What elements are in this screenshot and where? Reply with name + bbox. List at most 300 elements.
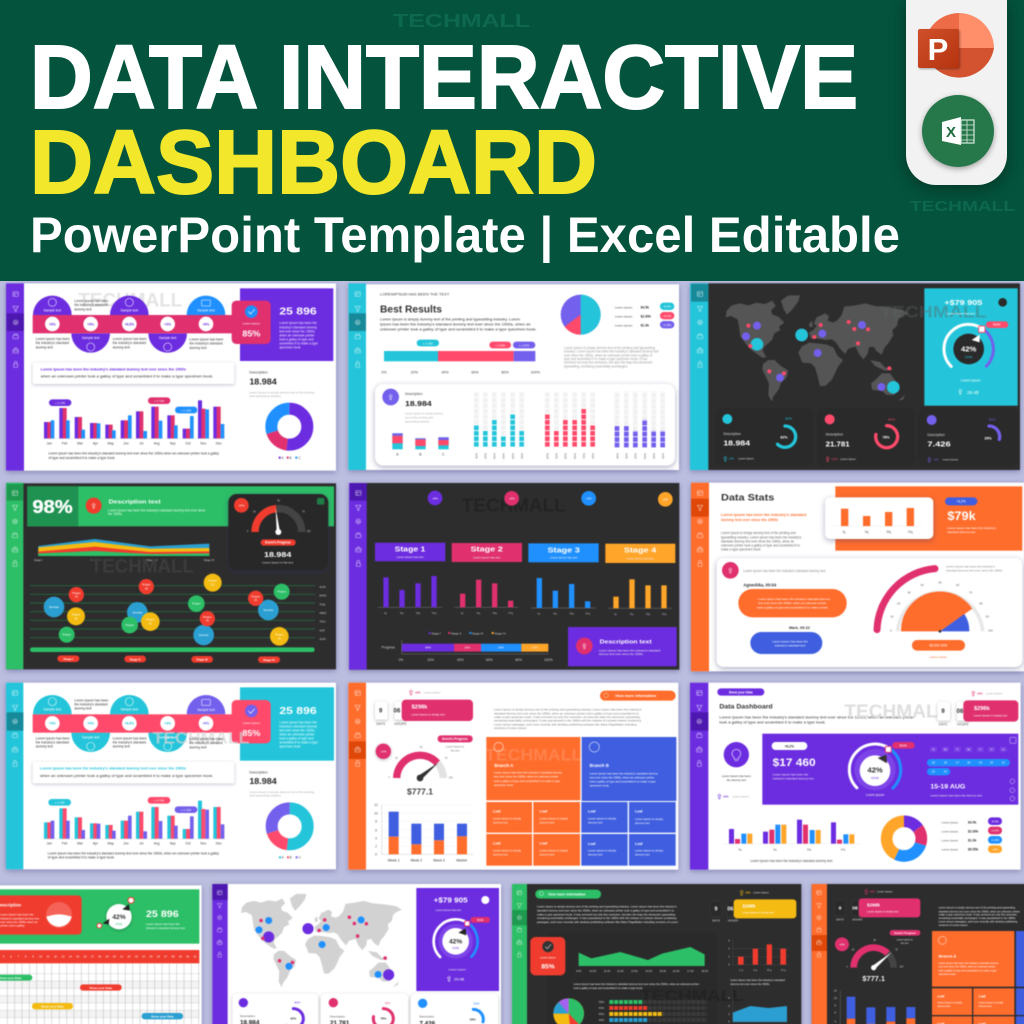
panel: Best Results: Lorem Ipsum: [615, 314, 633, 318]
panel: dark orange treemap (cropped): Lorem Ipsum is simply: [979, 1002, 1004, 1005]
panel: teal KPI dashboard: Feb: [62, 842, 68, 846]
panel: Best Results: 40%: [615, 453, 619, 459]
panel: green project timeline: Stage I: [34, 558, 43, 562]
panel: dark green analytics: 16:00: [673, 969, 680, 973]
panel: dark green analytics: Lorem Ipsum: [753, 891, 770, 895]
panel: Data Stats: $79k: [947, 510, 976, 523]
panel: orange treemap: dummy text: [540, 820, 554, 824]
panel: dark green analytics: 2: [728, 955, 730, 959]
panel: Data Stats: +6,2%: [956, 500, 966, 504]
panel: Best Results: typesetting, remaining essentially unchanged.: [564, 364, 628, 368]
panel: Data Dashboard purple: $4.5k: [968, 820, 976, 824]
panel: Best Results: ever since the 1500s, when an unknown printer took a galley of: [564, 353, 652, 357]
panel: purple KPI dashboard: Lorem Ipsum: [243, 322, 261, 326]
panel: Best Results: 30%: [634, 453, 638, 459]
panel: orange treemap: dummy text: [635, 853, 650, 857]
panel: dark world map: 18.984: [723, 439, 751, 448]
panel: green project timeline: Project: [146, 618, 155, 622]
panel: Data Dashboard purple: DONE: [871, 776, 879, 780]
panel: Data Stats: Lorem Ipsum has been the industry's standard dummy: [758, 597, 830, 601]
panel: purple KPI dashboard: of type and scrambled it to make a type book.: [48, 456, 116, 460]
panel: white world map purple: Description: [419, 1015, 435, 1019]
panel: dark orange treemap (cropped): Lorem Ipsum passages, and more recently with desktop publishing: [939, 920, 1018, 924]
panel: four stages dark: 13%: [532, 646, 538, 650]
panel: Data Stats: Lorem Ipsum has been the industry's: [946, 564, 995, 568]
panel: Data Dashboard purple: -8.4%: [991, 819, 999, 823]
panel: Data Stats: 20: [897, 602, 901, 606]
panel: four stages dark: IIq: [477, 611, 480, 615]
panel: Best Results: 30%: [555, 453, 559, 459]
panel: teal KPI dashboard: May: [108, 842, 114, 846]
panel: orange treemap: Event's Progress: [442, 737, 468, 741]
panel: purple KPI dashboard: 85%: [242, 330, 260, 339]
panel: orange treemap: Lorem Ipsum is simply: [635, 849, 664, 853]
panel: orange treemap: dummy text: [493, 820, 508, 824]
panel: dark green analytics: Lorem Ipsum is simply dummy text of the printing and typesetting industry. Lorem Ipsum has been the industry's: [537, 904, 677, 908]
panel: dark green analytics: 6: [728, 996, 730, 1000]
panel: Best Results: Description: [405, 392, 422, 396]
panel: green project timeline: WED: [319, 611, 327, 615]
panel: Data Dashboard purple: Lorem Ipsum: [942, 839, 959, 843]
panel: dark orange treemap (cropped): +6%: [869, 890, 875, 894]
panel: Data Stats: Lorem Ipsum has been the industry's standard dummy text.: [743, 569, 826, 573]
panel: green project timeline: 02: [75, 616, 78, 620]
panel: Best Results: Ipsum has been the industry's standard dummy text ever since the 1500s, when an: [380, 322, 531, 326]
panel: four stages dark: 100%: [544, 658, 553, 662]
panel: orange treemap: TECHMALL: [485, 745, 582, 764]
panel: orange treemap: HOURS: [394, 722, 407, 726]
panel: dark green analytics: II q: [753, 968, 758, 972]
panel: dark orange treemap (cropped): +6%: [839, 942, 845, 946]
panel: green calendar (cropped): 9: [32, 954, 34, 958]
panel: orange treemap: 25: [395, 758, 398, 760]
panel: teal KPI dashboard: the industry's standard: [74, 702, 108, 706]
panel: purple KPI dashboard: + 4 700: [154, 399, 164, 403]
panel: orange treemap: dummy text: [493, 852, 508, 856]
panel: green calendar (cropped): 22: [128, 954, 131, 958]
panel: orange treemap: Week4: [456, 859, 467, 863]
panel: dark orange treemap (cropped): Lorem Ipsum is simply dummy text of the printing and typesetting: [939, 905, 1016, 909]
panel: orange treemap: Leaf: [493, 809, 501, 813]
panel: purple KPI dashboard: took a galley of type and: [279, 337, 314, 341]
panel: orange treemap: dummy text: [588, 820, 603, 824]
panel: Best Results: 50%: [643, 453, 647, 459]
panel: teal KPI dashboard: of type and scrambled it to make a type book.: [48, 856, 115, 860]
panel: Data Dashboard purple: Lorem Ipsum has been the industry's standard dummy text.: [750, 859, 833, 863]
panel: teal KPI dashboard: [6, 683, 336, 869]
panel: teal KPI dashboard: Lorem Ipsum has been: [74, 698, 109, 702]
panel: green project timeline: Event's Progress: [265, 541, 291, 545]
panel: Data Dashboard purple: S: [1002, 747, 1004, 751]
panel: green project timeline: Stage I: [63, 657, 73, 661]
panel: dark green analytics: 1 q: [739, 968, 743, 972]
panel: orange treemap: Leaf: [635, 810, 643, 814]
panel: Best Results: $4.5k: [641, 306, 649, 310]
panel: green project timeline: Stage III: [196, 658, 208, 662]
panel: teal KPI dashboard: Jul: [139, 842, 144, 846]
panel: dark green analytics: 9: [715, 906, 718, 912]
panel: teal KPI dashboard: Lorem Ipsum has been: [36, 736, 70, 740]
panel: dark orange treemap (cropped): [812, 884, 1024, 1024]
panel: purple KPI dashboard: Lorem Ipsum has been: [113, 337, 147, 341]
panel: Data Stats: Agneshka, 00:04: [743, 583, 777, 588]
panel: Data Dashboard purple: 19: [979, 761, 982, 765]
panel: orange treemap: Branch B: [590, 763, 609, 768]
panel: white world map purple: $32%: [474, 1003, 480, 1005]
panel: dark world map: TECHMALL: [880, 302, 987, 321]
panel: orange treemap: DAYS: [376, 722, 386, 726]
panel: green calendar (cropped): 26: [157, 954, 160, 958]
panel: purple KPI dashboard: Mar: [77, 441, 84, 445]
panel: dark green analytics: 14:00: [645, 969, 653, 973]
panel: teal KPI dashboard: dummy text: [74, 707, 92, 711]
panel: white world map purple: Description: [240, 1014, 255, 1018]
panel: Data Stats: Data Stats: [721, 492, 774, 502]
panel: Best Results: +1.8%: [663, 323, 672, 327]
panel: orange treemap: Branch A: [494, 763, 514, 768]
panel: dark green analytics: 17:00: [687, 969, 694, 973]
panel: green project timeline: SAT: [319, 628, 325, 632]
panel: dark orange treemap (cropped): 100: [899, 967, 904, 969]
panel: green project timeline: 25: [253, 511, 256, 513]
panel: Data Dashboard purple: Lorem Ipsum: [942, 829, 959, 833]
panel: Best Results: 30%: [520, 453, 524, 459]
panel: purple KPI dashboard: the industry's standard: [36, 341, 69, 345]
panel: dark green analytics: +6%: [745, 891, 751, 895]
panel: green project timeline: [6, 483, 336, 669]
panel: dark green analytics: standard dummy text ever since the 1500s, when an unknown printer took a galley of type and scrambled it to: [537, 909, 675, 913]
panel: Data Dashboard purple: 23: [944, 770, 947, 774]
panel: green calendar (cropped): 6: [10, 954, 12, 958]
panel: dark orange treemap (cropped): Leaf: [979, 995, 986, 999]
panel: green project timeline: 02: [211, 583, 215, 587]
title line one: DATA INTERACTIVE: [30, 28, 858, 128]
panel: Best Results: 20%: [502, 453, 506, 459]
panel: Best Results: 40%: [441, 370, 449, 374]
panel: Data Stats: industry's standard text: [775, 643, 805, 647]
panel: dark orange treemap (cropped): DAYS: [836, 918, 844, 922]
panel: green calendar (cropped): 12: [54, 954, 57, 958]
panel: dark green analytics: 9:00: [576, 969, 582, 973]
panel: dark green analytics: View more information: [548, 892, 585, 896]
panel: Data Stats: $5,900 3326: [930, 644, 947, 648]
panel: teal KPI dashboard: +3%: [164, 722, 171, 726]
panel: green project timeline: Project: [209, 579, 217, 583]
panel: dark green analytics: 06: [727, 906, 733, 912]
panel: white world map purple: [212, 884, 501, 1024]
panel: dark green analytics: dummy text ever since the 1500s.: [730, 982, 770, 986]
icon: Excel: [922, 95, 994, 167]
panel: orange treemap: 100: [449, 778, 453, 780]
panel: dark orange treemap (cropped): remaining essentially unchanged. It was popularised in the 1960s: [939, 916, 1016, 920]
panel: orange treemap: Week 2: [410, 859, 422, 863]
dashboard thumbnails: [0, 283, 1024, 1024]
panel: orange treemap: $777.1: [407, 787, 434, 796]
panel: Best Results: LOREMIPSUM HAS BEEN THE TEXT: [380, 292, 450, 297]
panel: green project timeline: Seminar: [49, 605, 59, 609]
panel: Data Dashboard purple: $2.89k: [968, 829, 978, 833]
panel: teal KPI dashboard: when an unknown printer: [279, 733, 315, 737]
panel: green project timeline: 02: [278, 636, 281, 640]
panel: dark green analytics: 55%: [599, 1012, 605, 1016]
panel: orange treemap: 12: [374, 803, 378, 807]
panel: teal KPI dashboard: Oct: [185, 842, 191, 846]
panel: teal KPI dashboard: 25 896: [279, 706, 317, 717]
panel: four stages dark: 60%: [486, 658, 493, 662]
panel: Data Dashboard purple: Lorem Ipsum: [942, 848, 959, 852]
panel: green calendar (cropped): printer took a galley: [0, 924, 25, 928]
panel: dark orange treemap (cropped): the text: [901, 942, 909, 945]
panel: four stages dark: IVq: [508, 611, 513, 615]
panel: teal KPI dashboard: Lorem Ipsum has been the industry's standard dummy text ever since the 1500s: [40, 767, 186, 771]
panel: orange treemap: text ever since the 1500s, when an unknown printer: [494, 775, 559, 779]
panel: green project timeline: Project: [275, 632, 284, 636]
panel: white world map purple: 29.4$: [454, 977, 465, 982]
panel: dark orange treemap (cropped): 50: [873, 940, 877, 942]
panel: orange treemap: Lorem Ipsum is simply: [635, 817, 664, 821]
panel: dark orange treemap (cropped): 25: [852, 950, 855, 952]
panel: dark orange treemap (cropped): 12: [834, 989, 837, 993]
panel: purple KPI dashboard: and typesetting industry.: [249, 394, 282, 398]
panel: Best Results: industry. Lorem Ipsum has been the industry's standard dummy text: [564, 350, 659, 354]
panel: four stages dark: Lorem Ipsum has text: [550, 556, 577, 560]
panel: green calendar (cropped): 29: [179, 954, 182, 958]
panel: Data Stats: 60: [956, 583, 960, 587]
subtitle: PowerPoint Template | Excel Editable: [30, 207, 900, 264]
panel: orange treemap: dummy text: [635, 821, 650, 825]
panel: green calendar (cropped): 11: [47, 954, 50, 958]
panel: teal KPI dashboard: + 2 100: [55, 801, 65, 805]
panel: four stages dark: Progress: [382, 645, 395, 649]
panel: dark green analytics: remaining essentially unchanged. It was popularised in the 1960s with the release of Letraset sheets containing: [537, 916, 677, 920]
panel: dark world map: 7.426: [927, 440, 951, 449]
panel: dark orange treemap (cropped): 9: [839, 906, 842, 912]
panel: orange treemap: versions of Lorem Ipsum: [494, 726, 527, 730]
panel: Data Dashboard purple: T: [957, 747, 959, 751]
panel: four stages dark: 20%: [464, 646, 471, 650]
panel: Data Dashboard purple: took a galley of type and scrambled it to make a type book.: [719, 721, 826, 725]
panel: white world map purple: Description: [330, 1014, 345, 1018]
panel: orange treemap: remaining essentially unchanged. It was popularised in the 1960s with the release of Letraset sheets containing: [494, 719, 641, 723]
panel: dark world map: Lorem Ipsum has text: [946, 311, 975, 315]
panel: white world map purple: 62%: [290, 1017, 297, 1021]
panel: white world map purple: 42%: [449, 938, 462, 945]
panel: orange treemap: the text: [451, 748, 460, 752]
panel: green calendar (cropped): Lorem Ipsum has been the: [146, 922, 180, 926]
panel: white world map purple: $500K: [477, 920, 484, 922]
panel: green project timeline: Project: [203, 615, 212, 619]
panel: orange treemap: took a galley of type and scrambled it to make a type: [494, 779, 560, 783]
panel: purple KPI dashboard: +6%: [203, 322, 209, 326]
panel: green calendar (cropped): Show your Data: [89, 986, 112, 990]
panel: four stages dark: Lorem Ipsum has text: [626, 556, 654, 560]
panel: green project timeline: Stage II: [90, 558, 100, 562]
panel: purple KPI dashboard: Lorem Ipsum is simply dummy text of the printing: [249, 390, 315, 394]
panel: Data Dashboard purple: Lorem Ipsum: [732, 795, 749, 799]
panel: Data Stats: 30: [907, 591, 911, 595]
panel: orange treemap: text ever since the 1500s, when an unknown printer: [590, 775, 654, 779]
panel: orange treemap: Leaf: [635, 842, 643, 846]
panel: green calendar (cropped): 25 896: [146, 909, 179, 919]
panel: Data Dashboard purple: M: [944, 747, 946, 751]
panel: green project timeline: Stage IV: [204, 558, 215, 562]
panel: white world map purple: Lorem Ipsum: [449, 967, 467, 971]
panel: Data Stats: unknown printer took a galley of type and scrambled it to: [721, 544, 800, 548]
panel: teal KPI dashboard: Sample text: [159, 735, 177, 739]
panel: Data Dashboard purple: +6,2%: [785, 744, 794, 748]
panel: green calendar (cropped): DONE: [116, 924, 123, 926]
panel: four stages dark: +3%: [586, 497, 592, 501]
panel: dark world map: $20%: [785, 417, 793, 421]
panel: Data Dashboard purple: IIIq: [807, 848, 811, 852]
panel: four stages dark: TECHMALL: [462, 494, 566, 515]
panel: Best Results: 40%: [591, 453, 595, 459]
panel: teal KPI dashboard: +6%: [203, 722, 209, 726]
panel: teal KPI dashboard: Lorem Ipsum is simply dummy text of the printing: [249, 790, 315, 794]
panel: green project timeline: 98%: [32, 496, 73, 517]
panel: purple KPI dashboard: specimen book: [279, 345, 301, 349]
panel: dark world map: +2%: [729, 456, 735, 460]
panel: teal KPI dashboard: industry's standard dummy: [279, 725, 317, 729]
panel: green project timeline: Seminar: [199, 633, 209, 637]
panel: dark green analytics: 15:00: [659, 969, 667, 973]
panel: Data Dashboard purple: F: [991, 747, 993, 751]
panel: purple KPI dashboard: 18.984: [249, 377, 277, 386]
panel: teal KPI dashboard: Sep: [170, 842, 176, 846]
panel: Data Stats: Iq: [843, 530, 846, 534]
panel: four stages dark: Stage II: [451, 631, 461, 635]
panel: Best Results: 60%: [471, 370, 479, 374]
panel: green calendar (cropped): 17: [91, 954, 94, 958]
panel: four stages dark: Iq: [461, 611, 464, 615]
panel: Data Dashboard purple: DAYS: [939, 723, 947, 727]
panel: dark orange treemap (cropped): took a galley of type and scrambled it to make a type: [939, 969, 997, 972]
panel: teal KPI dashboard: Aug: [154, 842, 160, 846]
panel: green project timeline: Seminar: [132, 610, 142, 614]
panel: Data Dashboard purple: Lorem Ipsum: [986, 691, 1003, 695]
panel: teal KPI dashboard: Jan: [47, 842, 52, 846]
panel: dark world map: +5%: [933, 457, 939, 461]
panel: dark world map: 42%: [961, 345, 977, 354]
panel: dark world map: DONE: [965, 355, 973, 359]
panel: dark orange treemap (cropped): HOURS: [852, 918, 863, 922]
panel: purple KPI dashboard: Sample text: [44, 308, 61, 312]
panel: dark green analytics: Lorem Ipsum: [540, 955, 557, 959]
panel: Best Results: Lorem Ipsum: [615, 323, 633, 327]
panel: Data Dashboard purple: $9.55k: [968, 848, 978, 852]
panel: Data Stats: IVq: [908, 530, 913, 534]
panel: orange treemap: 4: [375, 836, 377, 840]
panel: teal KPI dashboard: Lorem Ipsum has been the industry's standard dummy text ever since the 1500s, when an unknown printer took a galley: [48, 851, 219, 855]
panel: purple KPI dashboard: Sep: [170, 441, 176, 445]
panel: dark orange treemap (cropped): Lorem Ipsum is simply text: [867, 910, 899, 914]
panel: Data Dashboard purple: Lorem Ipsum has been: [722, 774, 751, 778]
panel: teal KPI dashboard: Lorem Ipsum has been: [189, 737, 224, 741]
panel: green project timeline: Project: [252, 594, 260, 598]
panel: green calendar (cropped): 14: [69, 954, 72, 958]
panel: purple KPI dashboard: Lorem Ipsum has been: [189, 338, 224, 342]
panel: teal KPI dashboard: 18.984: [249, 777, 277, 786]
panel: Data Dashboard purple: the dummy text: [727, 778, 746, 782]
panel: white world map purple: DONE: [452, 948, 459, 950]
panel: four stages dark: +6%: [662, 498, 669, 502]
panel: green calendar (cropped): 31: [194, 954, 197, 958]
panel: purple KPI dashboard: Lorem Ipsum has been the: [279, 321, 317, 325]
panel: purple KPI dashboard: dummy text: [113, 345, 130, 349]
panel: green project timeline: Project: [278, 590, 286, 594]
panel: orange treemap: Leaf: [493, 842, 501, 846]
panel: green project timeline: Project: [192, 602, 201, 606]
panel: Data Stats: Lorem Ipsum is simply dummy text of the printing and: [721, 531, 796, 535]
panel: Data Stats: 80: [979, 602, 983, 606]
panel: dark green analytics: 0: [728, 1019, 730, 1023]
panel: purple KPI dashboard: Sample text: [121, 308, 138, 312]
panel: Best Results: 60%: [546, 453, 550, 459]
panel: dark green analytics: 6: [728, 938, 730, 942]
watermark under icons: TECHMALL: [910, 198, 1015, 215]
panel: green calendar (cropped): industry's standard dummy text: [0, 916, 39, 920]
panel: purple KPI dashboard: Lorem Ipsum has been the industry's standard dummy text ever since the 1500s when an unknown printer took a galley: [48, 452, 219, 456]
panel: dark orange treemap (cropped): 6: [835, 1011, 837, 1015]
panel: purple KPI dashboard: +3%: [164, 322, 171, 326]
panel: Data Dashboard purple: 21: [1002, 761, 1005, 765]
panel: green calendar (cropped): 15: [76, 954, 80, 958]
panel: four stages dark: dummy text ever since the 1500s.: [599, 652, 644, 656]
panel: dark orange treemap (cropped): dummy text: [979, 1005, 992, 1008]
panel: Data Dashboard purple: 20: [990, 761, 994, 765]
panel: Best Results: 70%: [582, 453, 586, 459]
panel: dark world map: 21.781: [826, 439, 850, 448]
panel: purple KPI dashboard: the industry's standard: [189, 342, 223, 346]
panel: dark world map: [690, 283, 1020, 470]
panel: orange treemap: took a galley of type and scrambled it to make a type: [590, 780, 656, 784]
panel: orange treemap: $298k: [412, 705, 428, 711]
panel: orange treemap: [348, 683, 678, 870]
panel: purple KPI dashboard: B: [289, 456, 292, 460]
panel: orange treemap: dummy text: [588, 853, 603, 857]
panel: teal KPI dashboard: Nov: [200, 842, 207, 846]
panel: orange treemap: Leaf: [588, 810, 596, 814]
panel: Data Stats: 0: [890, 629, 892, 633]
panel: teal KPI dashboard: + 4 700: [154, 799, 164, 803]
panel: dark green analytics: 40%: [599, 1006, 605, 1010]
panel: green project timeline: Stage II: [130, 657, 140, 661]
panel: Best Results: typesetting industry: [405, 419, 430, 423]
panel: green project timeline: Seminar: [263, 608, 273, 612]
panel: teal KPI dashboard: Apr: [93, 842, 99, 846]
panel: Data Dashboard purple: $1.9k: [968, 839, 976, 843]
panel: Data Dashboard purple: industry's standard dummy text: [773, 776, 814, 780]
panel: four stages dark: Description text: [600, 640, 652, 646]
panel: Best Results: + 3 500: [495, 343, 505, 347]
panel: four stages dark: +6%: [432, 496, 438, 500]
panel: dark orange treemap (cropped): Branch A: [939, 954, 956, 959]
panel: teal KPI dashboard: when an unknown printer took a galley of type and scrambled it to make a type specimen book.: [40, 774, 213, 778]
panel: green calendar (cropped): 28: [172, 954, 175, 958]
panel: Data Stats: Lorem Ipsum: [930, 655, 948, 659]
panel: dark green analytics: 18:00: [701, 969, 709, 973]
panel: orange treemap: 75: [445, 758, 448, 760]
panel: purple KPI dashboard: Jul: [139, 441, 144, 445]
panel: Data Dashboard purple: 16: [944, 761, 947, 765]
panel: green project timeline: Project: [126, 623, 134, 627]
panel: teal KPI dashboard: dummy text: [36, 745, 53, 749]
panel: Best Results: 100%: [531, 370, 541, 374]
panel: Best Results: Lorem Ipsum is simply dummy: [405, 411, 444, 415]
panel: Data Dashboard purple: Lorem Ipsum has been the dummy text: [930, 794, 982, 798]
panel: teal KPI dashboard: C: [299, 856, 302, 860]
panel: four stages dark: +3%: [509, 497, 515, 501]
